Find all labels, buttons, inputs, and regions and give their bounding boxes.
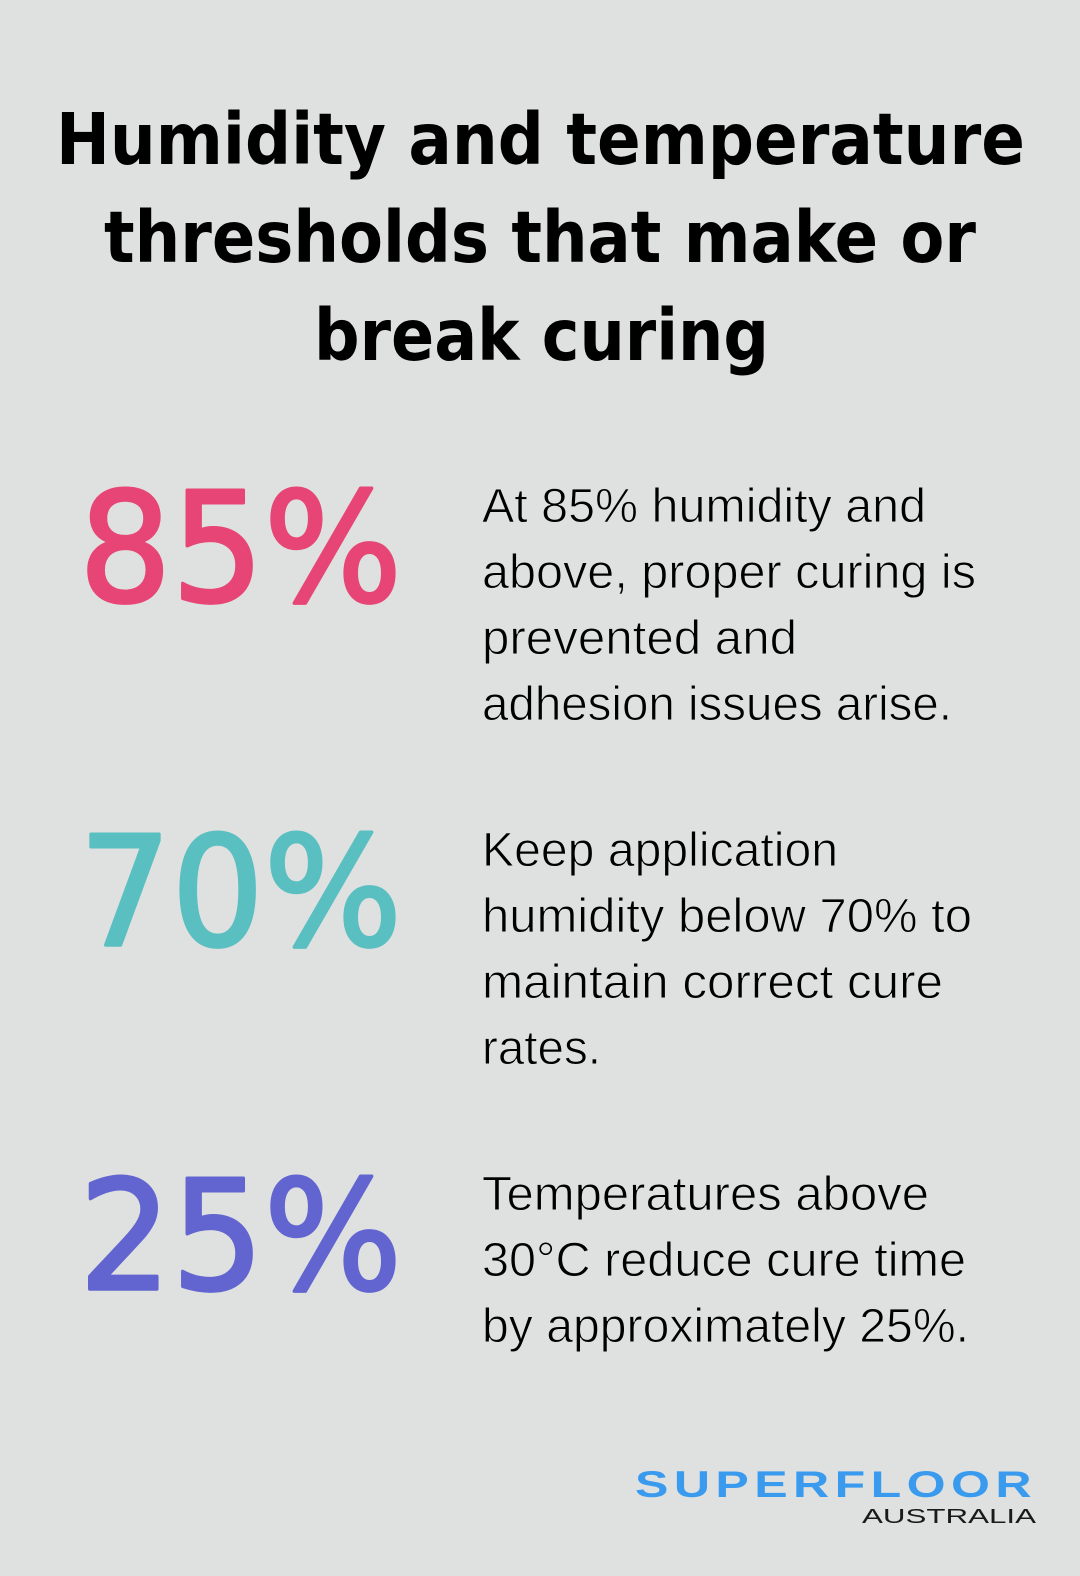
logo: Superfloor Australia [635, 1464, 1037, 1528]
number: 85%: 85% [79, 460, 402, 637]
text: 85% description: adhesion issues arise. [482, 678, 952, 731]
text: 85% description: At 85% humidity and [482, 480, 926, 533]
text: 85% description: above, proper curing is [482, 546, 976, 599]
text: 85% description: prevented and [482, 612, 797, 665]
logo: Superfloor Australia: AUSTRALIA [862, 1506, 1037, 1528]
title [56, 98, 1025, 377]
text: 70% description: humidity below 70% to [482, 890, 972, 943]
text: 70% description [482, 824, 972, 1075]
text: 85% description [482, 480, 976, 731]
panel: 85% stat [79, 460, 976, 731]
panel: 25% stat [79, 1148, 969, 1353]
text: 25% description: 30°C reduce cure time [482, 1234, 966, 1287]
title: break curing [314, 294, 769, 377]
text: 25% description: by approximately 25%. [482, 1300, 969, 1353]
text: 25% description [482, 1168, 969, 1353]
text: 70% description: rates. [482, 1022, 601, 1075]
title: thresholds that make or [104, 196, 976, 279]
number: 25%: 25% [79, 1148, 402, 1325]
number: 70%: 70% [79, 804, 402, 981]
text: 70% description: Keep application [482, 824, 838, 877]
logo: Superfloor Australia: SUPERFLOOR [635, 1464, 1037, 1505]
panel: 70% stat [79, 804, 972, 1075]
text: 70% description: maintain correct cure [482, 956, 943, 1009]
text: 25% description: Temperatures above [482, 1168, 929, 1221]
